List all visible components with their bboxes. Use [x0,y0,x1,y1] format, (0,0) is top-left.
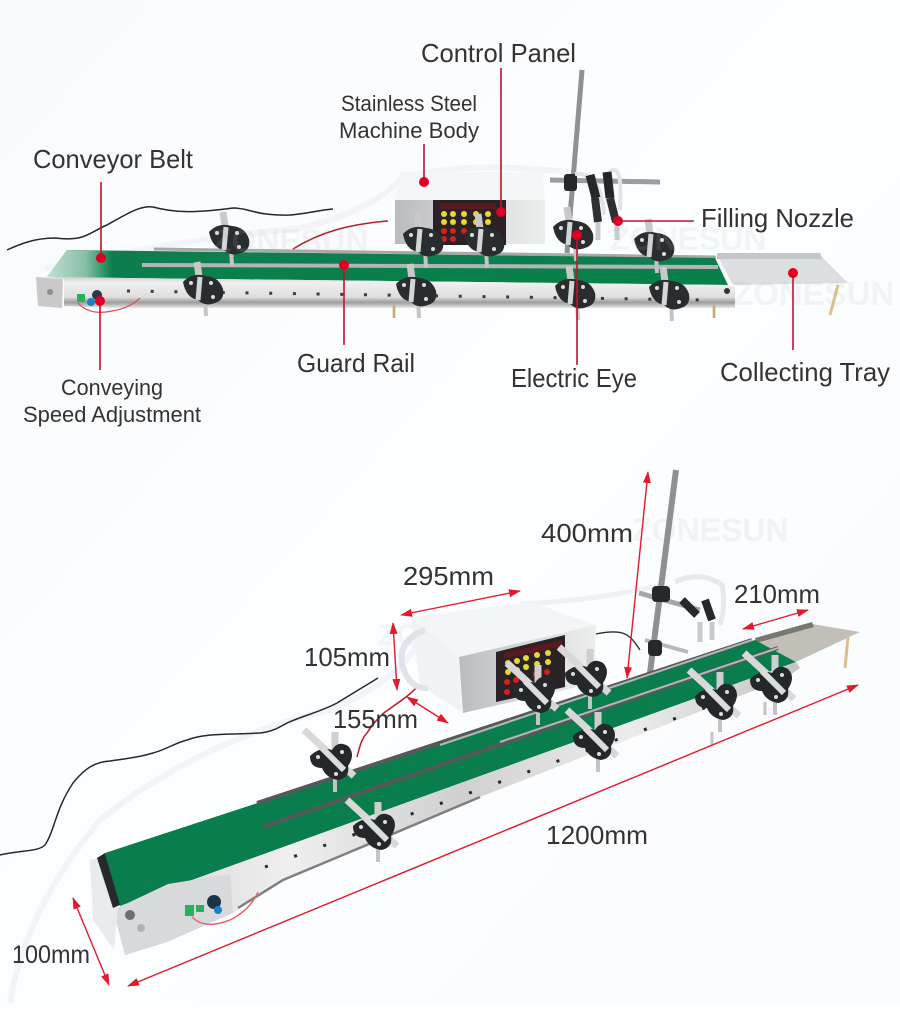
dimension labels: 1200mm [546,820,648,850]
dimension labels: 295mm [403,561,494,591]
guard rails [257,640,778,827]
control panel [433,200,506,245]
conveyor belt [47,250,728,285]
dimension labels: 100mm [12,941,90,969]
top labels: Electric Eye [511,363,637,393]
top product photo: conveyor with filling machine [7,70,848,321]
callouts: top photo leaders [95,68,798,370]
dimension labels: 155mm [333,704,418,734]
watermarks: ZONESUN [610,221,766,257]
power cable and hoses [7,168,570,268]
rail clamps [304,647,794,862]
top labels: Guard Rail [297,348,415,378]
top labels: Collecting Tray [720,357,890,387]
back guard rail [154,249,716,257]
conveyor belt [105,640,796,906]
speed adjustment knob [185,892,258,924]
mounting pegs [394,305,714,318]
top labels: Control Panel [421,38,576,68]
dimension labels [12,518,820,969]
rail clamps [183,207,689,321]
watermarks: ZONESUN [212,223,368,259]
pegs [712,702,765,745]
control panel [496,635,565,702]
speed adjustment knob [77,290,140,312]
filling machine body [401,602,596,713]
dimension labels: 400mm [541,518,633,548]
top labels: Speed Adjustment [23,402,201,427]
conveyor frame [36,277,735,308]
conveyor frame [90,662,800,955]
nozzle stand [639,470,724,673]
watermarks [212,221,894,652]
nozzle stand [550,70,660,253]
top labels [23,38,890,427]
tray [755,622,860,668]
collecting tray [717,253,848,315]
filling machine body [395,172,545,245]
top labels: Machine Body [339,118,479,143]
hoses and cables [0,585,660,1003]
watermarks: ZONESUN [632,512,788,548]
dimension arrows [73,472,858,986]
front guard rail [142,265,718,267]
dimension labels: 210mm [734,579,820,609]
watermarks: ZONESUN [378,619,525,652]
top labels: Filling Nozzle [701,203,854,233]
dimension labels: 105mm [304,642,390,672]
top labels: Stainless Steel [341,91,477,116]
bottom product photo: conveyor in perspective [0,470,860,1003]
top labels: Conveying [61,375,163,400]
top labels: Conveyor Belt [33,144,194,174]
watermarks: ZONESUN [733,275,894,312]
